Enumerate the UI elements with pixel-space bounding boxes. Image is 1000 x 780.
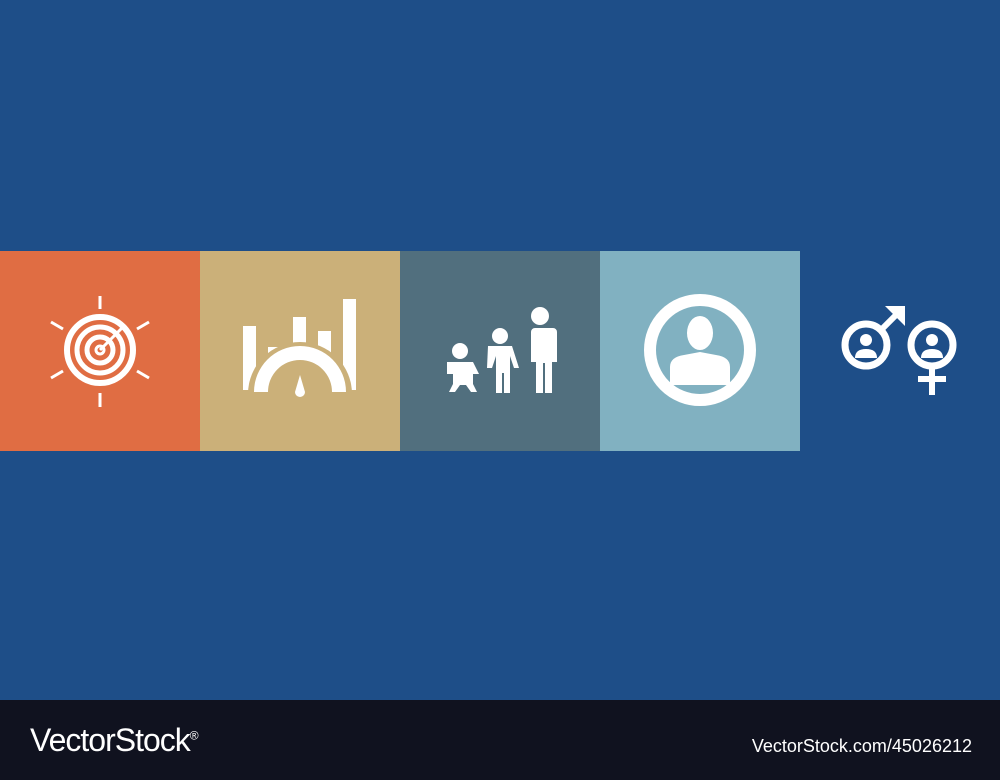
icon: family <box>447 307 557 393</box>
panel: person <box>600 251 800 451</box>
url text: VectorStock.com/45026212 <box>752 736 972 756</box>
panel: chart <box>200 251 400 451</box>
icon: person circle <box>650 300 750 400</box>
icon: target <box>51 296 149 407</box>
panel: target <box>0 251 200 451</box>
panel: family <box>400 251 600 451</box>
icon: gender <box>845 306 953 395</box>
footer <box>0 700 1000 780</box>
icon: chart gauge <box>243 299 356 397</box>
logo text: VectorStock® <box>30 722 198 758</box>
